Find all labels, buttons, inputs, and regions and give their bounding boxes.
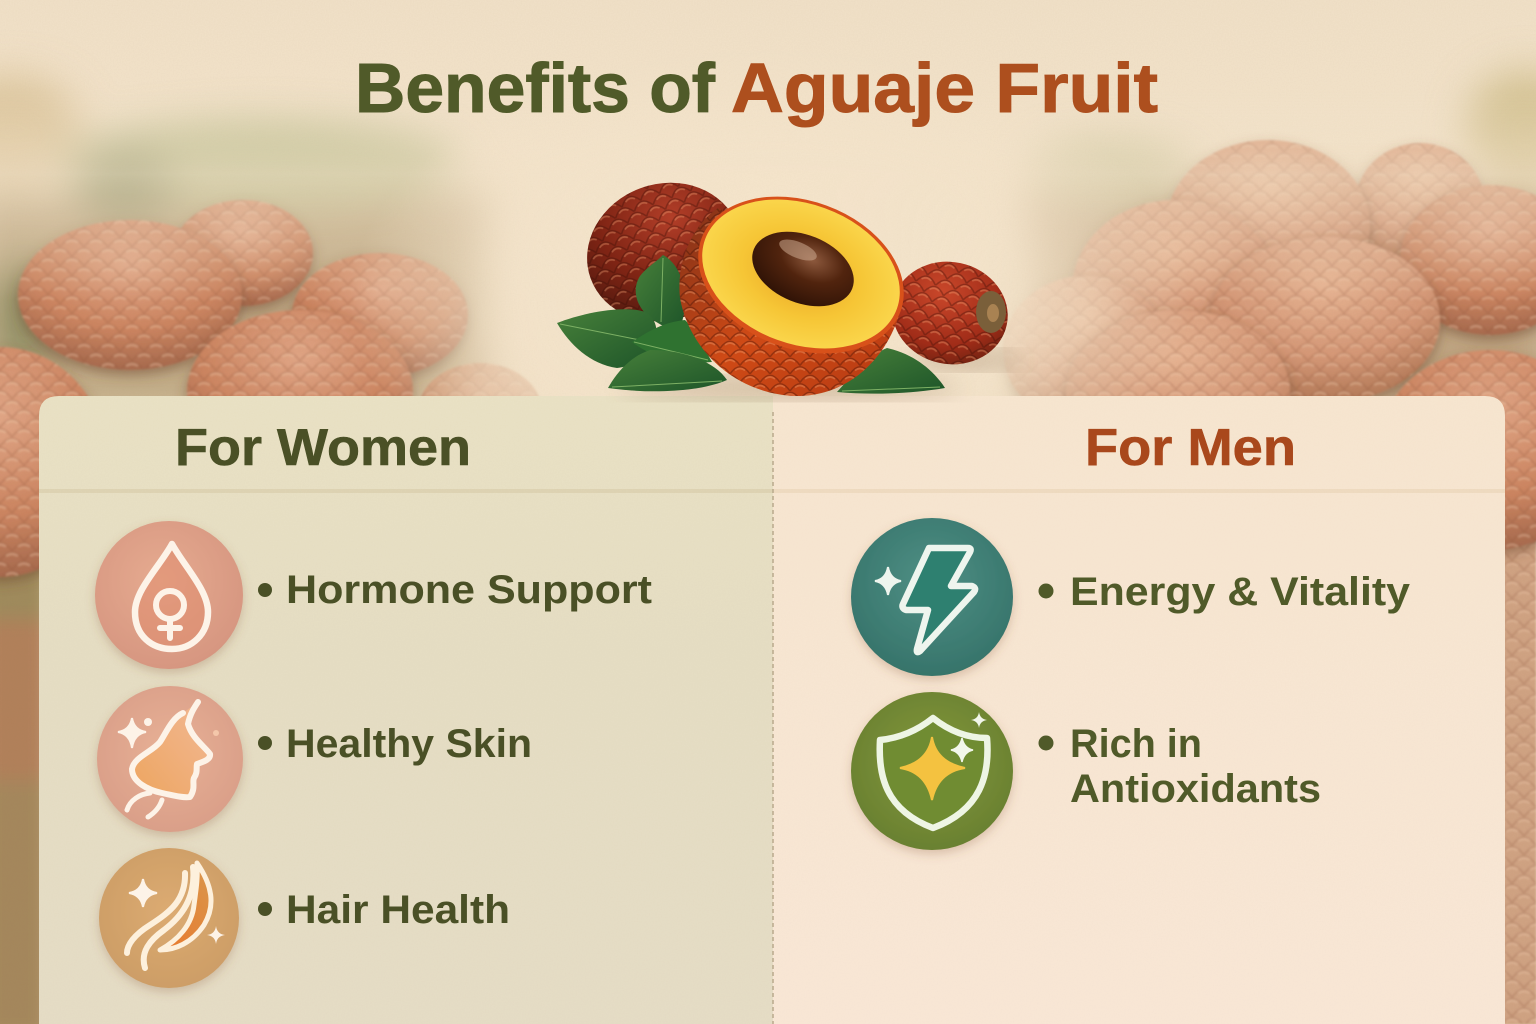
icon: lightning bolt (851, 518, 1013, 676)
right whole fruit (883, 251, 1017, 375)
seed (741, 218, 865, 320)
icon: flowing hair (99, 848, 239, 988)
benefit: healthy skin (97, 686, 532, 832)
bullet text (1038, 722, 1321, 811)
icon: face profile (97, 686, 243, 832)
fruit illustration (557, 161, 1020, 397)
leaf: lower left (608, 350, 727, 391)
leaf: upright (636, 255, 685, 327)
heading: for women: For Women (175, 419, 471, 477)
benefit: hormone support (95, 521, 652, 669)
bullet text: Hair Health (286, 888, 510, 932)
bullet text: Energy & Vitality (1070, 570, 1411, 614)
cut face: yellow flesh (681, 173, 921, 375)
leaf: left (557, 309, 656, 368)
benefit: rich in antioxidants (851, 692, 1321, 850)
leaf: centre (632, 320, 712, 362)
back-left whole fruit (567, 161, 761, 343)
benefit: energy and vitality (851, 518, 1411, 676)
title (355, 49, 1158, 127)
bullet text: Hormone Support (286, 568, 652, 612)
bullet text: Rich in (1070, 722, 1202, 766)
cut fruit body (679, 208, 903, 396)
leaf: right (837, 348, 945, 394)
icon: shield with star (851, 692, 1013, 850)
title: Aguaje Fruit (731, 49, 1158, 127)
title: Benefits of (355, 49, 716, 127)
heading: for men: For Men (1085, 419, 1296, 477)
panel: for men (773, 396, 1505, 1024)
cut face: orange rim (676, 169, 926, 381)
benefit: hair health (99, 848, 510, 988)
panel: for women (39, 396, 773, 1024)
bullet text: Antioxidants (1070, 767, 1321, 811)
icon: drop with venus symbol (95, 521, 243, 669)
bullet text: Healthy Skin (286, 722, 532, 766)
